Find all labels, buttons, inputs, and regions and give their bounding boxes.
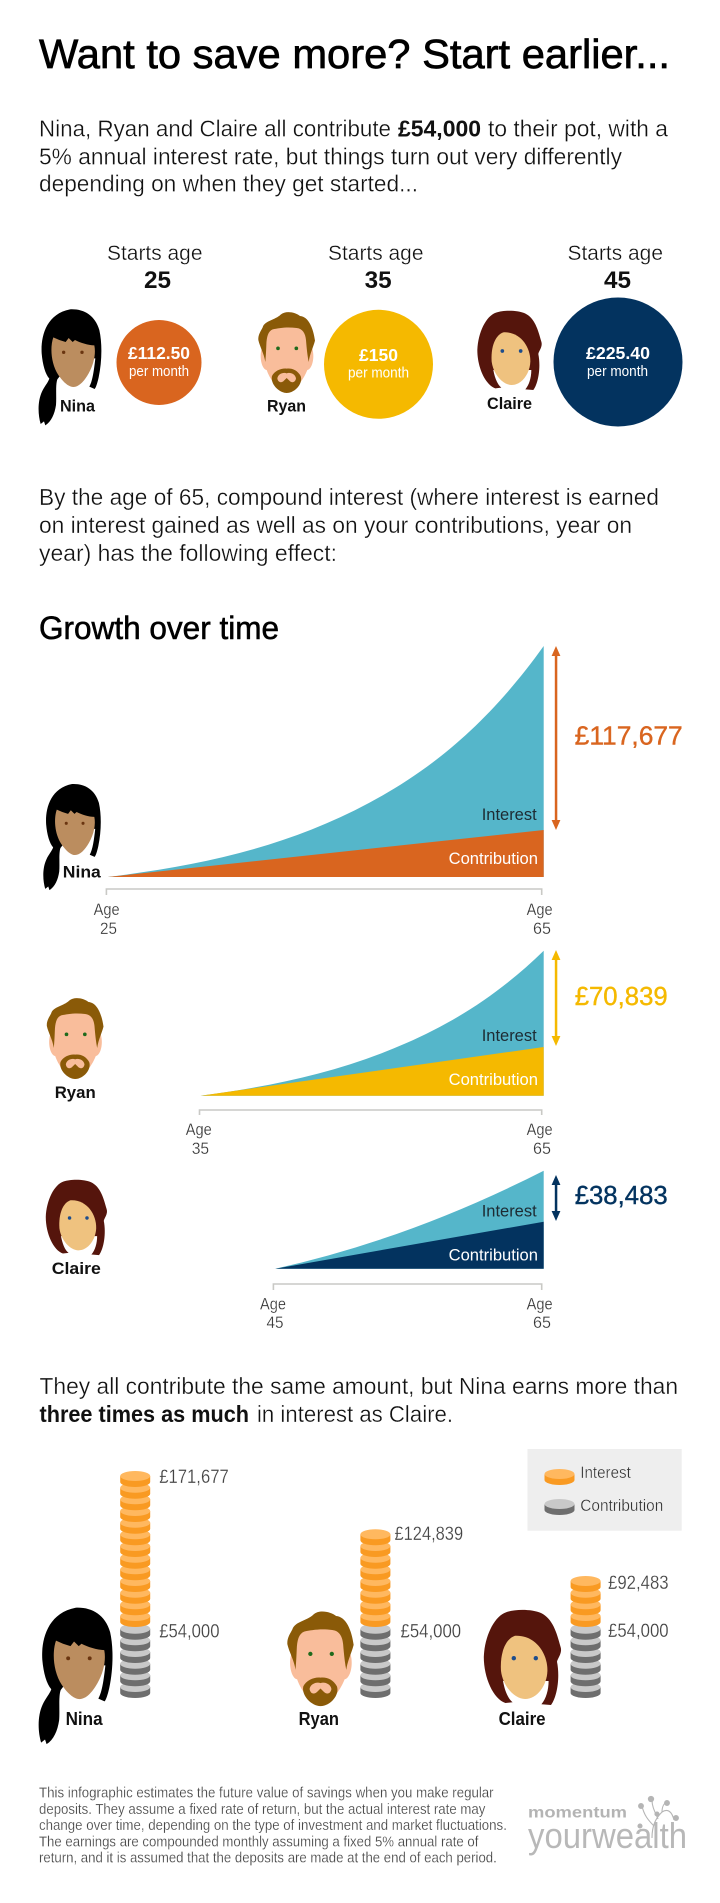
Nina coins (120, 1471, 150, 1698)
intro paragraph: 5% annual interest rate, but things turn out very differently (39, 143, 622, 169)
Ryan start label (328, 242, 424, 294)
footnote: This infographic estimates the future value of savings when you make regular (39, 1785, 494, 1801)
Claire chart labels: Contribution (449, 1247, 538, 1265)
Claire start label: Starts age (568, 242, 663, 265)
legend: interest label: Interest (580, 1464, 631, 1482)
Nina age axis: Age (94, 900, 120, 919)
Ryan name small: Ryan (55, 1083, 96, 1102)
chart: Ryan growth (47, 950, 668, 1158)
title: Want to save more? Start earlier... (39, 31, 670, 77)
Claire chart labels: Interest (482, 1203, 537, 1221)
Ryan total value: £124,839 (394, 1523, 463, 1545)
panel: Claire starts age 45 (477, 242, 682, 426)
Claire name small: Claire (52, 1259, 101, 1278)
Claire age axis: Age (527, 1294, 553, 1313)
footnote (39, 1785, 507, 1867)
logo: momentum yourwealth: yourwealth (528, 1815, 687, 1856)
icon: Claire face small (46, 1180, 107, 1255)
intro paragraph: to their pot, with a (488, 116, 668, 142)
Claire monthly circle: £225.40 (586, 343, 650, 363)
comparison sentence: They all contribute the same amount, but Nina earns more than (40, 1373, 678, 1399)
Nina interest area (108, 646, 544, 877)
icon: Ryan face (258, 312, 315, 393)
legend: contribution coin (544, 1499, 574, 1515)
Nina name small: Nina (63, 863, 101, 882)
Claire monthly circle: per month (587, 364, 648, 380)
Ryan contribution value: £54,000 (400, 1621, 461, 1643)
compound interest paragraph: year) has the following effect: (39, 540, 337, 566)
compound interest paragraph (39, 484, 659, 566)
legend (528, 1449, 682, 1531)
intro paragraph: £54,000 (398, 116, 481, 142)
icon: Claire face large (484, 1610, 561, 1705)
Ryan age axis: 35 (192, 1139, 209, 1158)
Claire contribution area (275, 1222, 544, 1269)
icon: Nina face large (39, 1608, 113, 1744)
Nina contribution area (108, 830, 544, 877)
Claire start label (568, 242, 663, 294)
panel: Claire coin stack (484, 1572, 669, 1729)
Ryan age axis (186, 1110, 553, 1158)
logo: momentum yourwealth (528, 1796, 687, 1856)
Ryan start label: Starts age (328, 242, 424, 265)
Claire age axis: 65 (533, 1313, 551, 1332)
Nina age axis: Age (527, 900, 553, 919)
icon: Ryan face large (287, 1612, 354, 1706)
Nina monthly circle (116, 320, 202, 405)
intro paragraph (39, 116, 668, 197)
Ryan monthly circle: per month (348, 366, 409, 382)
Nina start label: 25 (144, 267, 171, 294)
legend: contribution label: Contribution (580, 1497, 663, 1515)
Ryan chart labels: Contribution (449, 1071, 538, 1089)
Ryan age axis: 65 (533, 1139, 551, 1158)
Ryan chart labels: Interest (482, 1027, 537, 1045)
panel: Ryan starts age 35 (258, 242, 433, 419)
footnote: The earnings are compounded monthly assuming a fixed 5% annual rate of (39, 1835, 479, 1851)
Claire total value: £92,483 (608, 1572, 669, 1594)
Ryan start label: 35 (365, 267, 392, 294)
Ryan age axis: Age (527, 1120, 553, 1139)
panel: Ryan coin stack (287, 1523, 463, 1729)
Ryan name: Ryan (267, 398, 306, 416)
Claire chart labels (449, 1203, 538, 1265)
Claire name large: Claire (499, 1708, 546, 1729)
legend: interest coin (544, 1469, 574, 1485)
Ryan name large: Ryan (299, 1708, 339, 1729)
panel: Nina starts age 25 (39, 242, 203, 425)
icon: Nina face small (43, 784, 101, 890)
Nina monthly circle: per month (129, 364, 189, 380)
chart: Claire growth (46, 1171, 668, 1332)
compound interest paragraph: on interest gained as well as on your contributions, year on (39, 512, 632, 538)
footnote: change over time, depending on the type of investment and market fluctuations. (39, 1818, 507, 1834)
intro paragraph: Nina, Ryan and Claire all contribute (39, 116, 391, 142)
comparison sentence: three times as much (40, 1401, 249, 1427)
arrow: Nina interest height (552, 646, 560, 830)
chart: Nina growth (43, 646, 683, 938)
Ryan interest area (200, 951, 544, 1096)
Nina contribution value: £54,000 (159, 1621, 220, 1643)
Claire interest value: £38,483 (575, 1180, 668, 1210)
Claire contribution value: £54,000 (608, 1620, 669, 1642)
Nina age axis: 65 (533, 919, 551, 938)
Nina age axis: 25 (100, 919, 117, 938)
comparison sentence (40, 1373, 678, 1427)
Nina chart labels: Contribution (449, 850, 538, 868)
compound interest paragraph: By the age of 65, compound interest (where interest is earned (39, 484, 659, 510)
Ryan monthly circle (324, 310, 433, 419)
logo: momentum yourwealth: momentum (528, 1805, 627, 1822)
Nina total value: £171,677 (159, 1466, 229, 1488)
Nina name large: Nina (66, 1708, 103, 1729)
Ryan contribution area (200, 1047, 544, 1096)
Claire name: Claire (487, 395, 532, 413)
Claire coins (571, 1576, 601, 1698)
icon: Claire face (477, 311, 542, 390)
intro paragraph: depending on when they get started... (39, 171, 418, 197)
Claire age axis: 45 (266, 1313, 284, 1332)
Nina chart labels (449, 806, 538, 868)
Nina name: Nina (60, 398, 96, 416)
arrow: Ryan interest height (552, 950, 560, 1046)
Claire age axis: Age (260, 1294, 286, 1313)
Nina start label: Starts age (107, 242, 202, 265)
Ryan age axis: Age (186, 1120, 212, 1139)
Nina start label (107, 242, 202, 294)
Claire start label: 45 (604, 267, 631, 294)
footnote: return, and it is assumed that the deposits are made at the end of each period. (39, 1851, 497, 1867)
icon: logo tree (638, 1796, 678, 1838)
icon: Ryan face small (47, 998, 103, 1079)
icon: Nina face (39, 309, 101, 425)
Ryan chart labels (449, 1027, 538, 1089)
Claire monthly circle (554, 298, 682, 426)
Ryan interest value: £70,839 (575, 981, 668, 1011)
comparison sentence: in interest as Claire. (257, 1401, 453, 1427)
heading: growth over time: Growth over time (39, 610, 279, 646)
Nina interest value: £117,677 (575, 720, 683, 750)
Nina age axis (94, 889, 553, 938)
Claire interest area (275, 1171, 544, 1269)
Nina chart labels: Interest (482, 806, 537, 824)
footnote: deposits. They assume a fixed rate of return, but the actual interest rate may (39, 1802, 486, 1818)
Ryan coins (360, 1529, 390, 1698)
Nina monthly circle: £112.50 (128, 343, 190, 363)
Ryan monthly circle: £150 (359, 345, 398, 365)
Claire age axis (260, 1284, 553, 1332)
arrow: Claire interest height (552, 1175, 560, 1221)
panel: Nina coin stack (39, 1466, 229, 1744)
